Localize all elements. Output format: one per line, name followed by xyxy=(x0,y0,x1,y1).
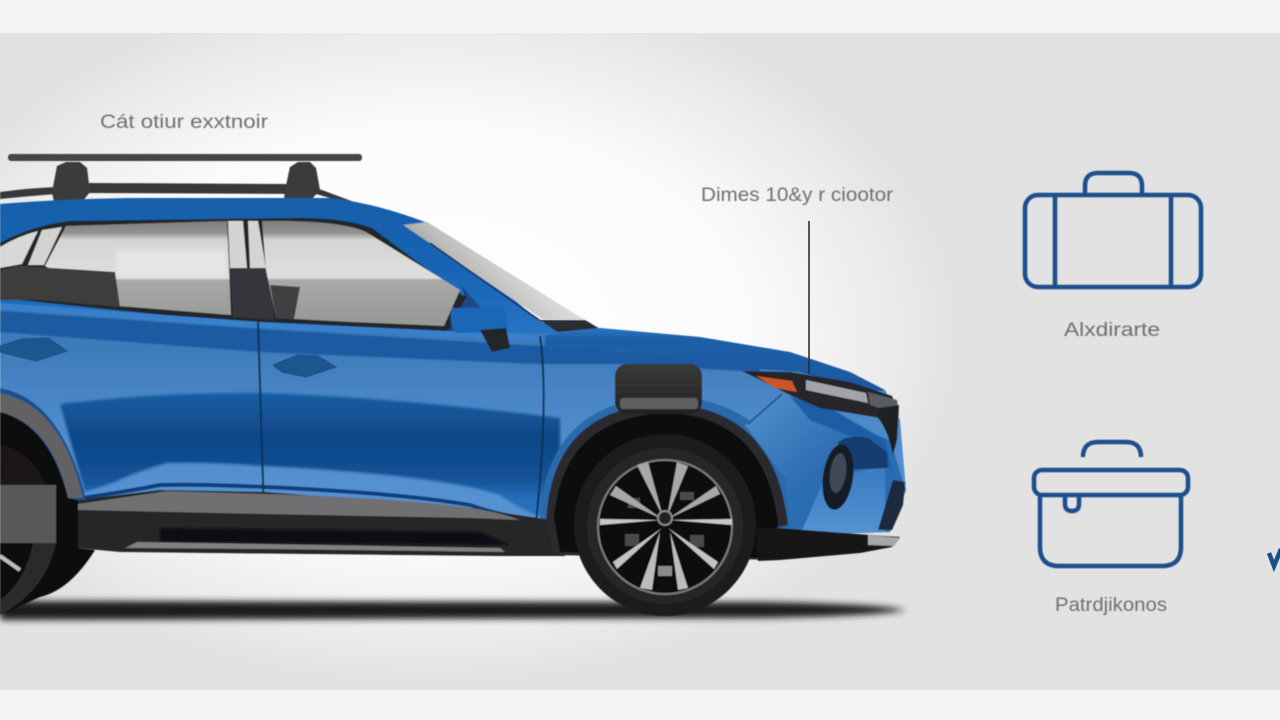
grille xyxy=(878,405,899,455)
windshield xyxy=(403,222,585,320)
A-pillar inner xyxy=(446,284,506,336)
icon: cropped check mark xyxy=(1269,549,1280,566)
front door glass xyxy=(262,221,460,326)
mid dark panel xyxy=(60,393,560,524)
ground shadow xyxy=(0,601,906,620)
rear wheel xyxy=(0,388,95,615)
headlight xyxy=(742,371,899,418)
car body lower panel xyxy=(0,300,910,535)
hood xyxy=(545,328,885,392)
label: toolbox: Patrdjikonos xyxy=(1055,595,1167,616)
fender crease xyxy=(748,394,782,424)
label: roof rack: Cát otiur exxtnoir xyxy=(100,112,269,133)
arch surround xyxy=(540,396,800,530)
icon: suitcase xyxy=(1025,173,1201,287)
lower edge xyxy=(84,482,506,514)
top strip xyxy=(0,0,1280,33)
front wheel xyxy=(574,434,756,616)
rear glass dark reflection xyxy=(0,266,120,307)
label: suitcase: Alxdirarte xyxy=(1064,320,1160,341)
centre pillar xyxy=(228,221,266,268)
waist highlight xyxy=(0,306,540,338)
roof band and A-pillar xyxy=(0,198,600,345)
door handle rear xyxy=(0,338,67,361)
windshield lower edge xyxy=(430,243,542,322)
door seams xyxy=(258,322,544,545)
callout line xyxy=(808,221,810,374)
door handle front xyxy=(273,355,336,377)
front bumper panel xyxy=(745,394,906,535)
rear door glass xyxy=(45,221,231,315)
fog lamp recess xyxy=(819,437,905,530)
quarter glass xyxy=(0,231,38,268)
front splitter xyxy=(756,528,900,561)
side mirror xyxy=(448,296,510,352)
label: front callout: Dimes 10&y r ciootor xyxy=(701,185,894,206)
front wheel arch xyxy=(546,404,788,560)
upper dark stripe xyxy=(0,311,760,372)
rear pillar xyxy=(28,227,62,265)
fender block xyxy=(615,364,702,414)
roof rack xyxy=(0,154,362,205)
icon: toolbox xyxy=(1034,442,1188,566)
brake detail xyxy=(625,492,704,576)
sill trim xyxy=(78,490,565,556)
side windows xyxy=(0,218,602,336)
bottom strip xyxy=(0,690,1280,720)
car xyxy=(0,154,910,616)
